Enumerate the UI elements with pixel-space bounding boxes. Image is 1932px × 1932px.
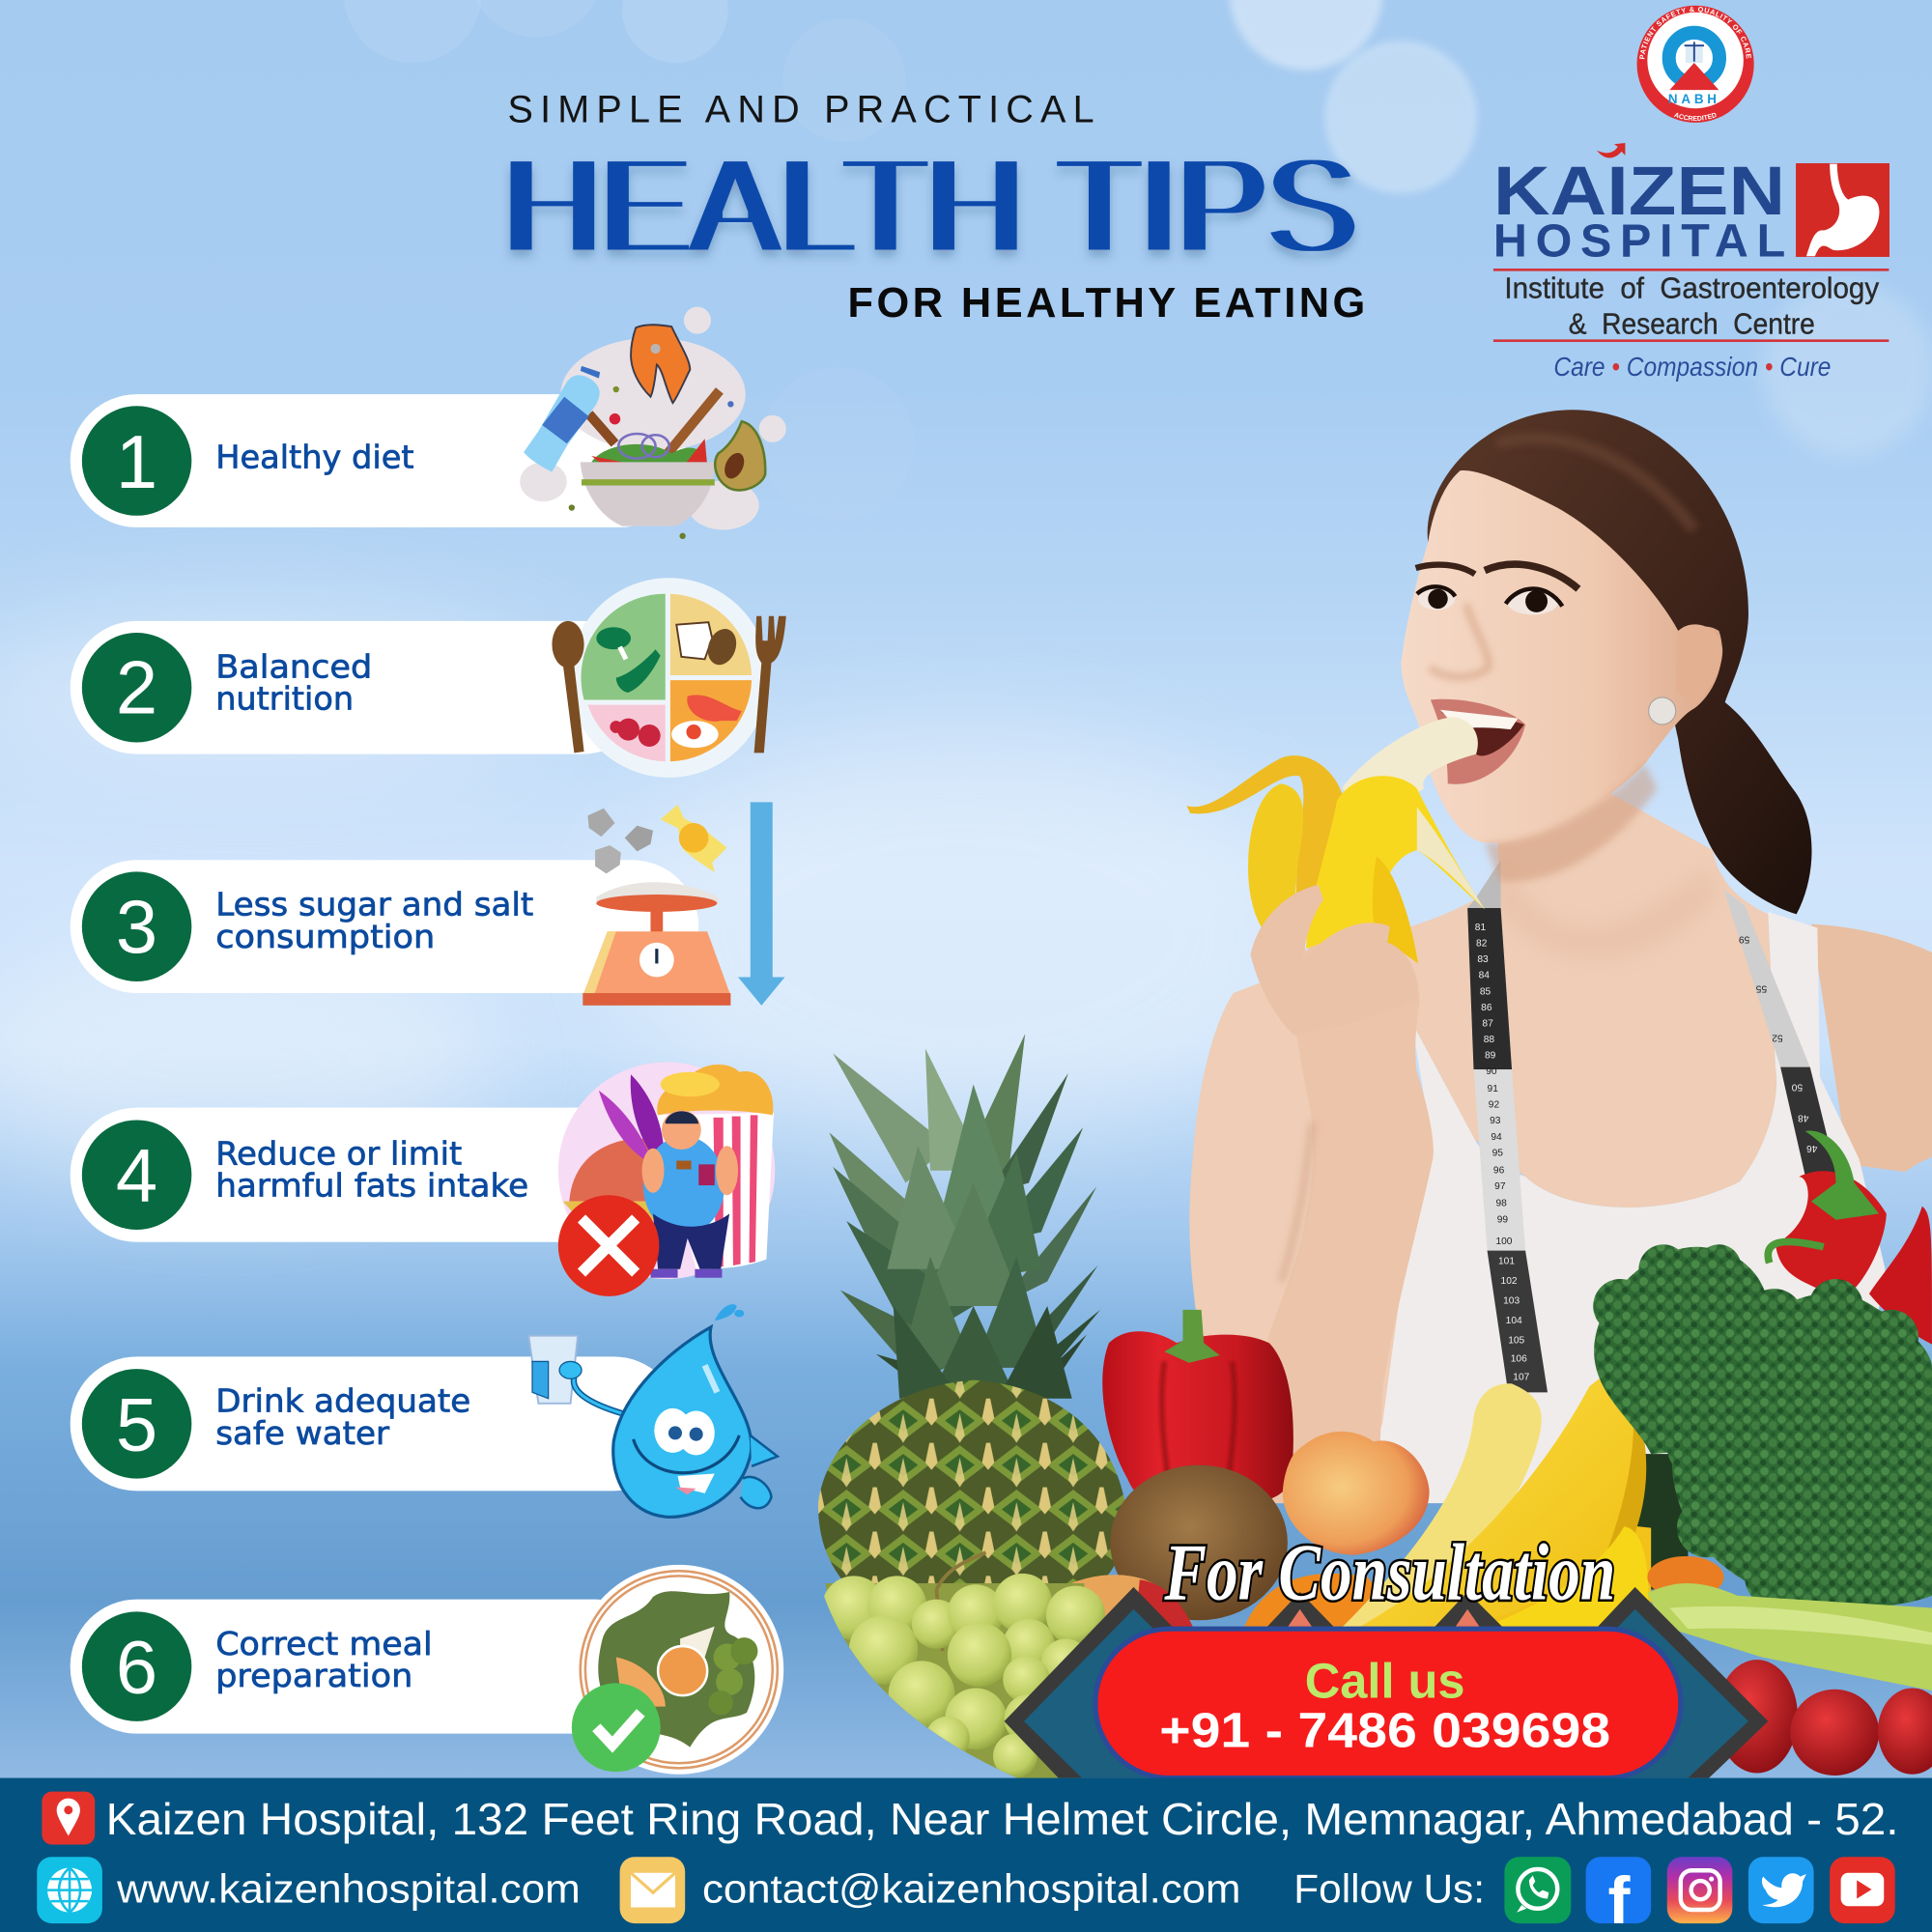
woman measuring tape left side: 107 <box>1513 1373 1530 1383</box>
woman right arm <box>1811 924 1932 1172</box>
hexagon ribbons <box>1005 1587 1768 1778</box>
tip 1: healthy diet <box>71 307 786 539</box>
woman measuring tape left side: 100 <box>1495 1236 1513 1247</box>
number 5: 5 <box>116 1383 157 1466</box>
woman measuring tape left side: 101 <box>1498 1257 1515 1267</box>
woman white tank top <box>1355 912 1886 1503</box>
number 3: 3 <box>116 886 157 969</box>
icon: fast food with overweight man and red cross <box>558 1062 775 1296</box>
woman measuring tape left side: 85 <box>1480 986 1492 997</box>
tip label: Correct meal <box>215 1625 433 1662</box>
phone number: +91 - 7486 039698 <box>1159 1703 1610 1758</box>
small orange <box>1647 1556 1723 1598</box>
subtitle: simple and practical: SIMPLE AND PRACTICAL <box>508 88 1094 130</box>
red chili peppers <box>1768 1130 1932 1345</box>
number 2: 2 <box>116 647 157 730</box>
pill background <box>71 394 686 527</box>
tip label <box>215 886 533 955</box>
address: Kaizen Hospital, 132 Feet Ring Road, Near Helmet Circle, Memnagar, Ahmedabad - 52. <box>106 1794 1899 1844</box>
institute line 1: Institute of Gastroenterology <box>1504 272 1880 305</box>
number 1: 1 <box>116 421 157 504</box>
broccoli front head <box>1667 1279 1932 1616</box>
woman measuring tape left side: 84 <box>1479 971 1490 981</box>
tip label <box>215 1134 528 1205</box>
woman nose and mouth <box>1430 604 1525 784</box>
number badge <box>82 633 191 742</box>
woman measuring tape left side: 82 <box>1476 939 1488 950</box>
woman measuring tape left side: 87 <box>1482 1018 1493 1029</box>
woman measuring tape right side: 59 <box>1739 933 1749 944</box>
woman measuring tape left side: 88 <box>1484 1035 1494 1045</box>
icon: whatsapp <box>1504 1857 1571 1923</box>
icon: portion plate with spoon and fork <box>552 578 786 778</box>
tip label <box>215 648 372 718</box>
title <box>504 88 1365 327</box>
icon: youtube <box>1830 1857 1895 1923</box>
woman measuring tape left side: 86 <box>1481 1003 1492 1013</box>
photo: woman eating a banana <box>1186 410 1932 1503</box>
red stomach tile <box>1796 163 1889 257</box>
celery stalks <box>1647 1583 1932 1690</box>
fingers over banana <box>1251 885 1417 1035</box>
pill background <box>71 860 698 993</box>
woman measuring tape right side: 55 <box>1755 982 1767 993</box>
apple <box>1283 1432 1430 1555</box>
woman measuring tape left side: 95 <box>1492 1148 1503 1158</box>
woman measuring tape left side: 104 <box>1506 1316 1522 1326</box>
pill background <box>71 1600 662 1734</box>
pill background <box>71 1108 662 1242</box>
broccoli back head <box>1593 1244 1770 1454</box>
NABH accreditation badge: PATIENT SAFETY & QUALITY OF CARE <box>1639 7 1751 60</box>
woman measuring tape left side: 96 <box>1493 1165 1505 1176</box>
woman measuring tape left side: 92 <box>1489 1100 1499 1111</box>
tip label: nutrition <box>215 680 354 718</box>
woman measuring tape left side: 90 <box>1486 1066 1497 1077</box>
icon: salad bowl, bottle, salmon, avocado <box>520 307 786 539</box>
woman measuring tape left side: 93 <box>1490 1116 1501 1126</box>
woman measuring tape right side: 52 <box>1772 1032 1783 1042</box>
woman measuring tape left side: 83 <box>1477 954 1489 965</box>
red bell pepper <box>1102 1310 1293 1514</box>
woman measuring tape left side: 89 <box>1485 1051 1496 1062</box>
woman measuring tape left side: 91 <box>1488 1084 1498 1094</box>
email: contact@kaizenhospital.com <box>702 1865 1240 1911</box>
woman face <box>1401 470 1722 842</box>
tip 5: drink water <box>71 1304 778 1517</box>
number 4: 4 <box>116 1135 157 1218</box>
pill background <box>71 1356 680 1491</box>
icon: instagram <box>1667 1857 1732 1923</box>
icon: twitter <box>1748 1857 1814 1923</box>
tip label: Less sugar and salt <box>215 886 533 923</box>
woman measuring tape left side: 99 <box>1497 1214 1508 1225</box>
kiwi <box>1110 1465 1288 1620</box>
woman measuring tape left side <box>1467 860 1548 1392</box>
woman measuring tape left side: 106 <box>1511 1353 1527 1364</box>
woman forearm and hand <box>1251 885 1434 1503</box>
tip label: Reduce or limit <box>215 1134 462 1172</box>
for consultation call-to-action <box>1005 1528 1768 1778</box>
icon: smiling water drop holding a glass <box>528 1304 778 1517</box>
wordmark Kaizen: KAIZEN <box>1493 153 1785 230</box>
tip label <box>215 1382 470 1452</box>
tomatoes <box>1717 1660 1932 1776</box>
institute line 2: & Research Centre <box>1569 308 1815 341</box>
woman measuring tape left side: 105 <box>1508 1335 1525 1346</box>
woman torso and left arm <box>1189 788 1776 1503</box>
tip 2: balanced nutrition <box>71 578 786 778</box>
footer contact bar <box>0 1778 1932 1932</box>
Kaizen Hospital logo <box>1493 143 1889 382</box>
woman measuring tape right side: 50 <box>1791 1081 1803 1092</box>
woman measuring tape left side: 94 <box>1491 1132 1502 1143</box>
tip label: consumption <box>215 918 435 955</box>
number 6: 6 <box>116 1627 157 1710</box>
number badge <box>82 406 191 516</box>
woman measuring tape left side: 97 <box>1494 1181 1506 1192</box>
peeled banana <box>1186 717 1485 963</box>
woman measuring tape left side: 81 <box>1475 923 1486 933</box>
woman measuring tape left side: 102 <box>1501 1276 1518 1287</box>
motto: Care • Compassion • Cure <box>1553 352 1831 382</box>
NABH accreditation badge: ACCREDITED <box>1673 112 1717 121</box>
number badge <box>82 1611 191 1721</box>
NABH accreditation badge: NABH <box>1668 92 1720 106</box>
number badge <box>82 1369 191 1479</box>
woman ponytail and hair <box>1428 410 1812 914</box>
woman pearl earring <box>1649 697 1676 724</box>
woman measuring tape right side: 48 <box>1798 1112 1808 1122</box>
woman eyes and brows <box>1416 564 1578 614</box>
red phone pill <box>1095 1629 1681 1778</box>
website: www.kaizenhospital.com <box>116 1865 581 1911</box>
tip label: Healthy diet <box>215 439 414 476</box>
dark shadow behind bananas <box>1627 1454 1688 1589</box>
icon: globe <box>37 1857 102 1923</box>
pill background <box>71 621 649 754</box>
tip label: Drink adequate <box>215 1382 470 1420</box>
icon: scale with sugar cubes and candy <box>582 802 784 1006</box>
NABH accreditation badge <box>1636 6 1754 123</box>
logo arrow <box>1597 143 1625 157</box>
tip label: harmful fats intake <box>215 1167 528 1205</box>
apple lower and orange wedge <box>1047 1574 1405 1651</box>
bananas <box>1337 1364 1651 1633</box>
photo: fresh fruit and vegetables <box>818 1034 1932 1778</box>
tip 6: correct meal preparation <box>71 1565 783 1775</box>
tip 4: reduce harmful fats <box>71 1062 775 1296</box>
icon: envelope <box>620 1857 685 1923</box>
follow us: Follow Us: <box>1293 1865 1485 1911</box>
woman measuring tape left side: 98 <box>1495 1199 1507 1209</box>
pineapple crown <box>829 1034 1100 1405</box>
icon: location pin <box>42 1792 95 1844</box>
main heading: health tips: HEALTH TIPS <box>504 129 1356 282</box>
ear <box>1676 624 1722 705</box>
pineapple body <box>818 1380 1126 1589</box>
tip label: safe water <box>215 1414 389 1452</box>
tip 3: less sugar and salt <box>71 802 784 1006</box>
script heading: For Consultation <box>1164 1528 1615 1618</box>
number badge <box>82 1120 191 1230</box>
green grapes <box>822 1552 1105 1778</box>
woman measuring tape right side <box>1723 890 1841 1191</box>
number badge <box>82 871 191 981</box>
wordmark Hospital: HOSPITAL <box>1493 214 1785 267</box>
woman measuring tape left side: 103 <box>1503 1295 1520 1306</box>
woman measuring tape right side: 46 <box>1806 1143 1817 1153</box>
tip label: preparation <box>215 1657 412 1694</box>
icon: salad plate with green tick <box>572 1565 783 1775</box>
tip label <box>215 1625 433 1694</box>
call us: Call us <box>1305 1654 1465 1709</box>
tagline: for healthy eating: FOR HEALTHY EATING <box>848 280 1365 327</box>
tip label: Balanced <box>215 648 372 686</box>
icon: facebook <box>1586 1857 1651 1932</box>
